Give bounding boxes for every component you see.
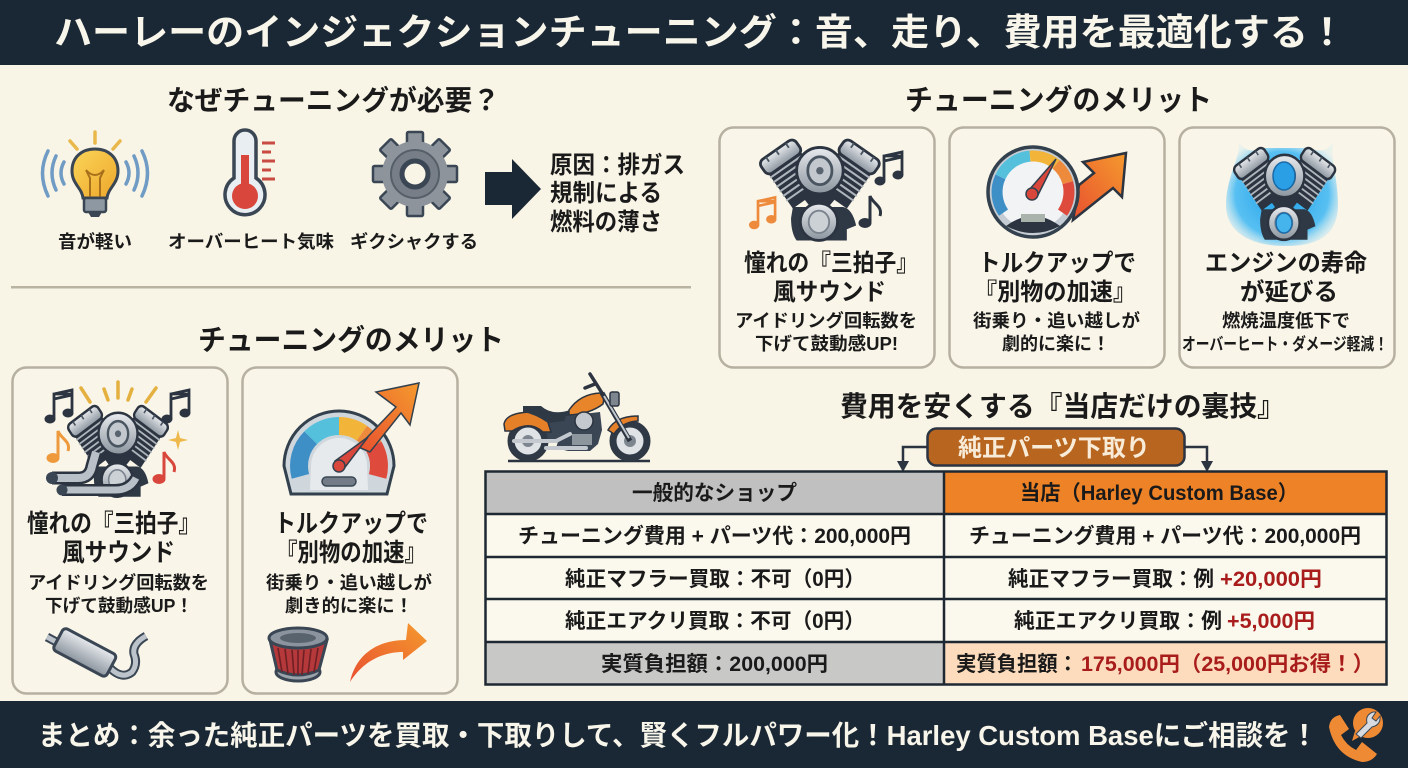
table header: our shop: 当店（Harley Custom Base）	[1020, 482, 1298, 505]
card heading: 憧れの『三拍子』	[744, 250, 918, 277]
card text: 劇的に楽に！	[1002, 334, 1110, 354]
icon: motorcycle	[504, 374, 650, 461]
card heading: 憧れの『三拍子』	[27, 510, 200, 538]
table header: general shop: 一般的なショップ	[632, 482, 797, 505]
label: light sound: 音が軽い	[58, 231, 132, 252]
row: total right: 175,000円（25,000円お得！）	[1081, 653, 1374, 676]
row: total right: 実質負担額：	[956, 653, 1078, 676]
footer text: まとめ：余った純正パーツを買取・下取りして、賢くフルパワー化！Harley Custom Baseにご相談を！	[38, 719, 1318, 751]
icon: air filter	[269, 628, 327, 681]
card heading: 風サウンド	[773, 279, 886, 306]
card heading: トルクアップで	[274, 510, 428, 538]
card text: 下げて鼓動感UP!	[755, 333, 898, 354]
icon: gear	[373, 132, 457, 216]
icon: engine with pipes and notes	[44, 382, 190, 497]
card heading: エンジンの寿命	[1205, 250, 1367, 277]
card text	[266, 572, 432, 616]
card text: 下げて鼓動感UP！	[45, 595, 193, 616]
text: cause: 原因：排ガス	[550, 152, 685, 179]
heading: merits: チューニングのメリット	[905, 84, 1212, 117]
text: cause: 規制による	[550, 180, 662, 207]
card text	[28, 572, 209, 616]
card text: 街乗り・追い越しが	[973, 310, 1140, 331]
panel: cost comparison	[485, 391, 1387, 685]
card: torque	[242, 368, 458, 694]
row: muffler right: 純正マフラー買取：例	[1008, 568, 1214, 591]
label: jerky: ギクシャクする	[350, 232, 478, 252]
card heading	[27, 510, 200, 567]
arrow: to cause	[485, 159, 541, 219]
card heading	[274, 510, 428, 567]
card text	[1182, 311, 1388, 354]
row: total right	[956, 653, 1374, 676]
row: muffler right	[1008, 568, 1322, 591]
row: tuning cost right: チューニング費用 + パーツ代：200,000円	[969, 524, 1361, 548]
card: sound	[720, 128, 934, 368]
arrow: right connector	[1185, 447, 1213, 472]
row: muffler right: +20,000円	[1220, 568, 1322, 591]
icon: engine with blue flames	[1226, 143, 1338, 246]
card text: 劇き的に楽に！	[285, 596, 413, 616]
card text: アイドリング回転数を	[735, 310, 917, 331]
card heading	[1205, 250, 1367, 306]
card heading: 『別物の加速』	[974, 279, 1136, 306]
row: air cleaner right: +5,000円	[1227, 610, 1315, 633]
row: air cleaner left: 純正エアクリ買取：不可（0円）	[565, 610, 865, 633]
card heading	[744, 250, 918, 306]
panel: merits bottom left	[0, 324, 1408, 768]
icon: engine with notes	[749, 138, 904, 240]
badge: trade-in	[928, 428, 1184, 466]
card: engine life	[1180, 128, 1394, 368]
card text: アイドリング回転数を	[28, 572, 209, 593]
icon: light bulb with sound waves	[42, 132, 148, 217]
row: muffler left: 純正マフラー買取：不可（0円）	[565, 568, 865, 591]
card heading: 風サウンド	[62, 539, 175, 567]
card heading: トルクアップで	[978, 250, 1136, 277]
title: ハーレーのインジェクションチューニング：音、走り、費用を最適化する！	[54, 12, 1346, 53]
row: tuning cost left: チューニング費用 + パーツ代：200,000円	[518, 524, 911, 548]
card text: 街乗り・追い越しが	[266, 572, 432, 593]
arrow: curved orange	[350, 623, 427, 682]
card heading	[974, 250, 1136, 306]
heading: why tuning: なぜチューニングが必要？	[167, 84, 500, 116]
icon: phone and wrench	[1329, 708, 1383, 762]
text: cause: 燃料の薄さ	[550, 209, 662, 236]
icon: round gauge with arrow	[988, 147, 1126, 237]
icon: dome gauge with arrow	[284, 383, 419, 494]
label: overheat: オーバーヒート気味	[168, 231, 334, 252]
card text	[973, 310, 1140, 354]
card text	[735, 310, 917, 354]
panel: merits top right	[720, 84, 1394, 368]
card: torque	[950, 128, 1164, 368]
card text: 燃焼温度低下で	[1222, 311, 1350, 331]
text: cause	[550, 152, 685, 236]
icon: thermometer	[225, 130, 275, 215]
badge: trade-in: 純正パーツ下取り	[958, 435, 1150, 462]
title bar	[0, 0, 1408, 65]
comparison table	[485, 471, 1387, 685]
card heading: が延びる	[1240, 278, 1338, 306]
row: air cleaner right: 純正エアクリ買取：例	[1014, 610, 1222, 633]
panel: why tuning is needed	[42, 84, 685, 252]
footer bar	[0, 701, 1408, 768]
arrow: left connector	[897, 447, 927, 472]
card: sound	[12, 368, 228, 694]
row: total left: 実質負担額：200,000円	[601, 653, 828, 676]
heading: merits: チューニングのメリット	[198, 324, 504, 357]
heading: cost trick: 費用を安くする『当店だけの裏技』	[840, 391, 1285, 422]
card heading: 『別物の加速』	[276, 539, 426, 567]
icon: muffler	[47, 627, 146, 678]
row: air cleaner right	[1014, 610, 1315, 633]
